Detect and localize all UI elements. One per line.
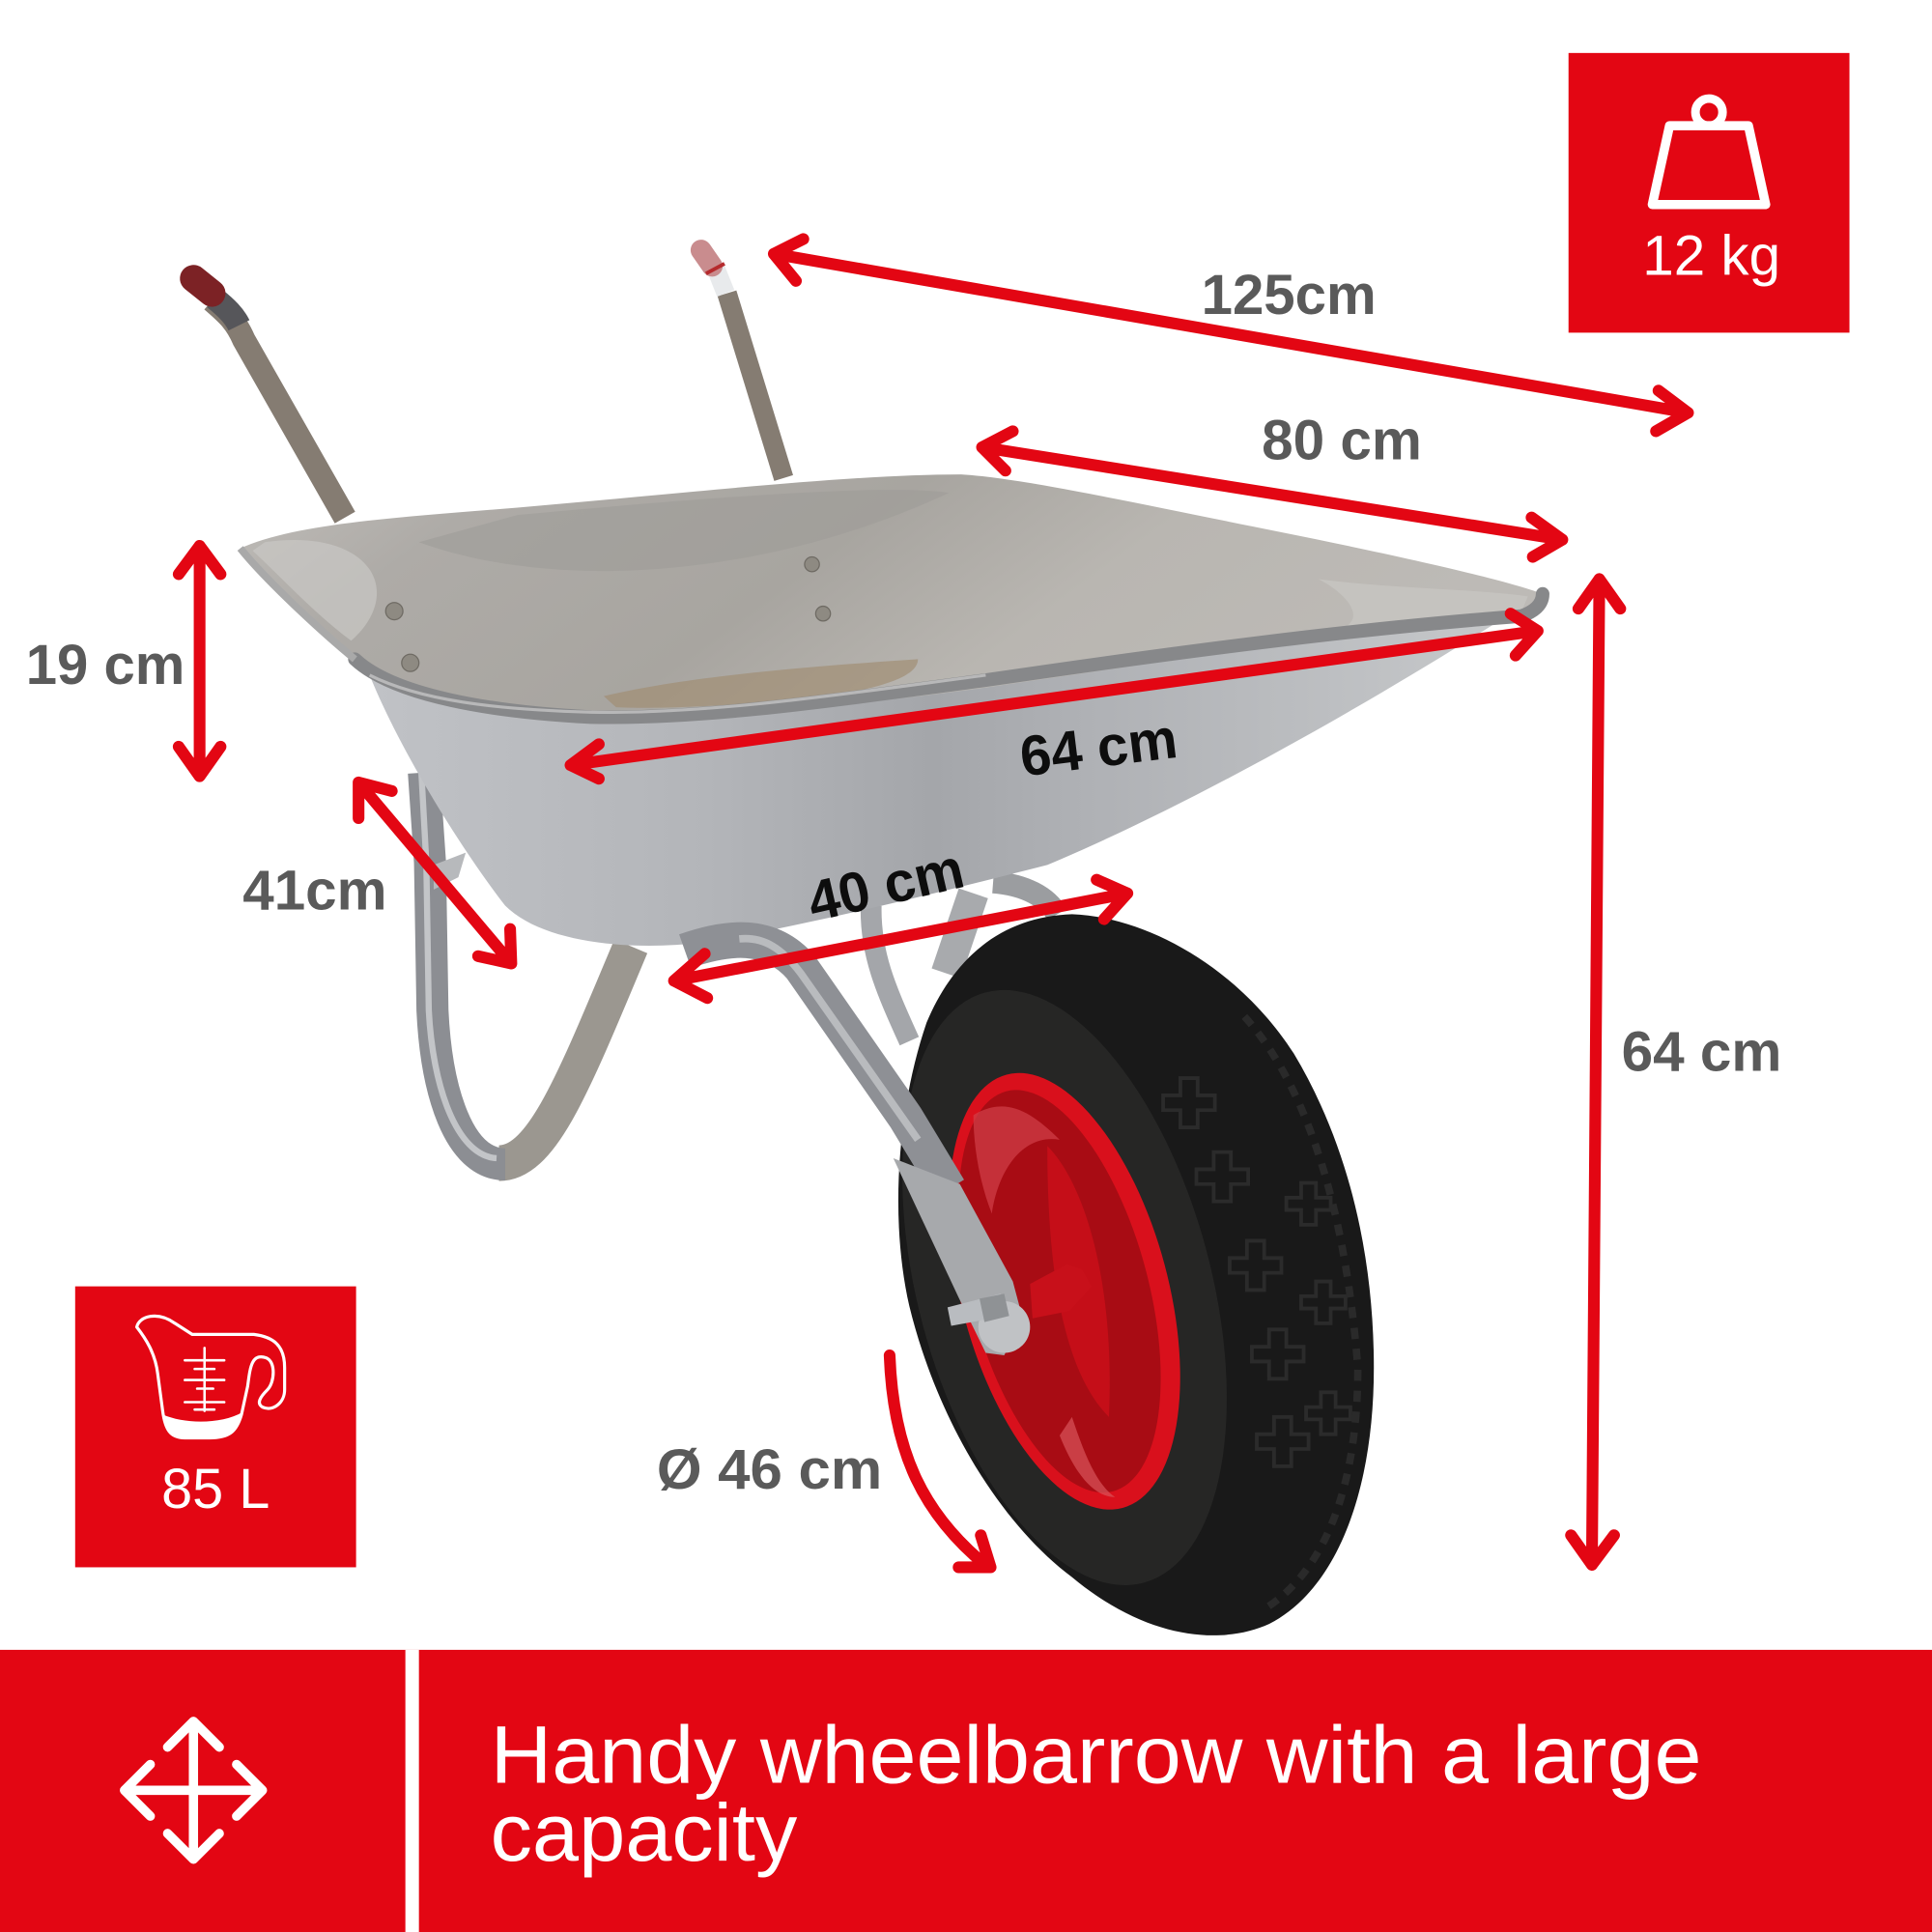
heading: capacity: [491, 1787, 797, 1878]
dimension: tray front arrow: [571, 613, 1538, 788]
red rim: [906, 1048, 1223, 1535]
label: 64 cm black: 64 cm: [1016, 707, 1180, 788]
label: diameter 46 cm: Ø 46 cm: [657, 1438, 882, 1501]
weight badge: [1569, 53, 1850, 332]
dimension: wheel diameter arrow: [657, 1355, 991, 1567]
icon: four-way arrows: [125, 1721, 263, 1860]
axle bolt: [979, 1301, 1030, 1353]
dimension: tray length arrow: [982, 410, 1562, 557]
label: 64 cm: 64 cm: [1622, 1020, 1781, 1083]
hub: [1030, 1264, 1092, 1319]
bolts: [385, 557, 831, 671]
tyre: [898, 914, 1374, 1635]
rear frame behind wheel: [871, 882, 1057, 1041]
stand legs: [421, 773, 631, 1164]
tyre tread blocks: [1163, 1078, 1350, 1466]
dimension: depth arrow: [26, 546, 220, 777]
label: 12 kg: 12 kg: [1642, 224, 1780, 287]
label: 19 cm: 19 cm: [26, 634, 185, 696]
label: 125cm: 125cm: [1202, 264, 1377, 327]
label: 40 cm black: 40 cm: [802, 838, 970, 934]
dimension: width arrow: [242, 782, 511, 963]
tray body: [370, 622, 1497, 946]
tray interior: [241, 474, 1543, 715]
dimension: height arrow: [1571, 579, 1781, 1565]
tyre knobby edge: [1244, 1016, 1358, 1609]
label: 41cm: 41cm: [242, 859, 387, 922]
left handle: [193, 278, 345, 518]
dimension: frame arrow: [674, 838, 1127, 998]
volume badge: [75, 1287, 356, 1567]
sidewall: [844, 954, 1286, 1621]
wheel: [844, 914, 1374, 1635]
footer band: [0, 1650, 1932, 1932]
front frame arm: [685, 939, 1030, 1355]
tray rim: [355, 594, 1543, 718]
heading: [491, 1710, 1701, 1878]
wheelbarrow photo: [193, 250, 1543, 1635]
right handle: [701, 250, 783, 478]
icon: weight: [1652, 99, 1766, 205]
icon: measuring jug: [137, 1316, 285, 1438]
heading: Handy wheelbarrow with a large: [491, 1710, 1701, 1801]
label: 85 L: 85 L: [161, 1458, 270, 1520]
label: 80 cm: 80 cm: [1262, 410, 1422, 472]
dimension: overall length arrow: [774, 239, 1688, 431]
